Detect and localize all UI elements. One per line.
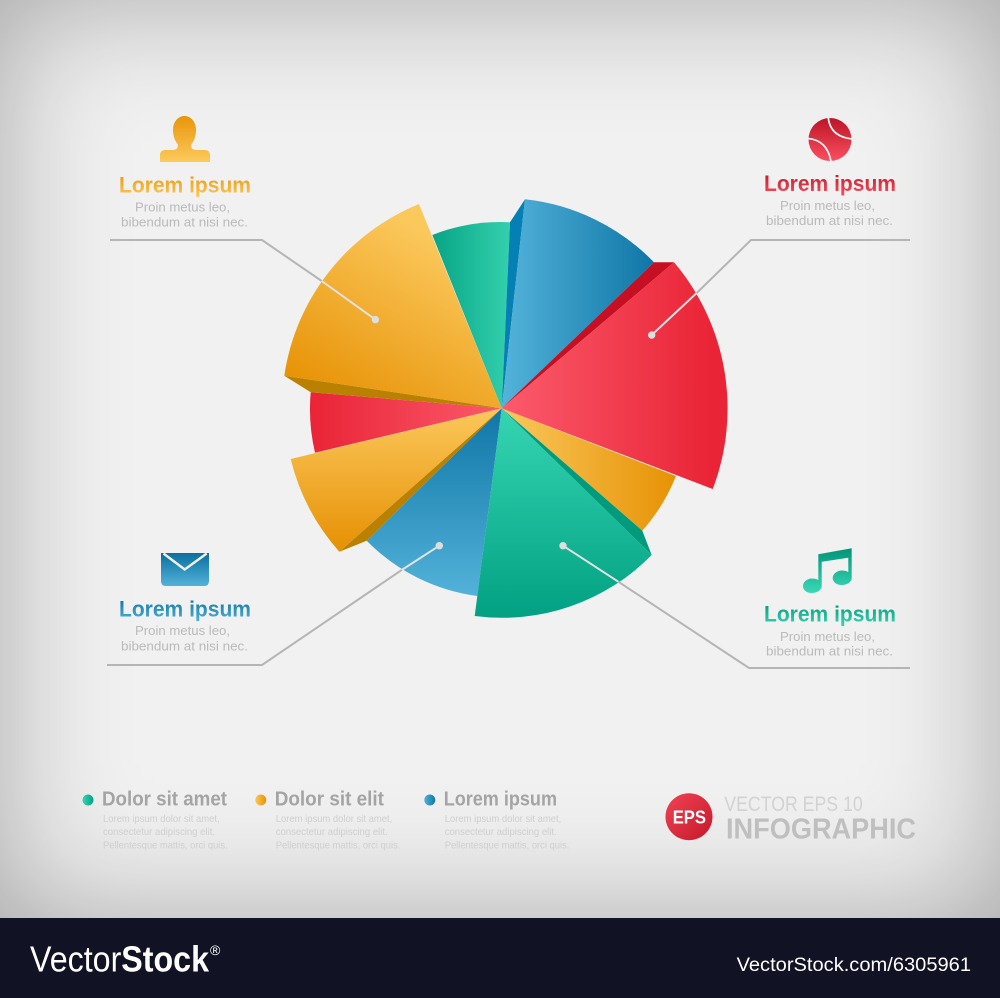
badge: EPS infographic bbox=[666, 793, 916, 845]
text block bbox=[121, 623, 248, 654]
text block bbox=[766, 629, 893, 659]
panel: top right callout bbox=[764, 118, 896, 228]
footer logo: VectorStock bbox=[30, 939, 210, 980]
slice: red left bbox=[310, 392, 502, 453]
heading: Lorem ipsum bbox=[119, 597, 251, 622]
legend text: consectetur adipiscing elit. bbox=[103, 826, 215, 838]
heading: Lorem ipsum bbox=[764, 602, 896, 627]
infographic label: INFOGRAPHIC bbox=[726, 813, 916, 845]
legend text: Lorem ipsum dolor sit amet, bbox=[445, 813, 561, 825]
slice: red right bbox=[502, 262, 728, 489]
heading: Lorem ipsum bbox=[119, 173, 251, 198]
legend dot bbox=[255, 794, 266, 806]
panel: legend item orange bbox=[255, 788, 400, 852]
footer bar bbox=[0, 918, 1000, 998]
panel: legend item blue bbox=[424, 788, 569, 852]
panel: bottom right callout bbox=[764, 548, 896, 659]
footer url: VectorStock.com/6305961 bbox=[737, 955, 971, 976]
icon: ball bbox=[808, 118, 852, 162]
legend text bbox=[445, 813, 569, 852]
slice side: red right bbox=[502, 262, 674, 408]
text block: bibendum at nisi nec. bbox=[766, 644, 893, 659]
text block: bibendum at nisi nec. bbox=[766, 213, 893, 228]
legend text: Pellentesque mattis, orci quis. bbox=[445, 840, 569, 852]
slice side: orange upper left bbox=[284, 376, 502, 408]
text block bbox=[766, 198, 893, 228]
slice: blue top bbox=[502, 199, 654, 408]
legend heading: Lorem ipsum bbox=[444, 788, 557, 810]
legend heading: Dolor sit elit bbox=[275, 788, 384, 810]
text block: Proin metus leo, bbox=[780, 198, 875, 213]
text block bbox=[121, 200, 248, 230]
icon: envelope bbox=[161, 553, 209, 586]
legend text bbox=[103, 813, 228, 852]
slice: blue bottom bbox=[367, 408, 502, 596]
text block: Proin metus leo, bbox=[135, 200, 230, 215]
badge label: EPS bbox=[673, 807, 706, 827]
leader line: bottom right bbox=[559, 542, 910, 668]
vector label: VECTOR EPS 10 bbox=[724, 793, 863, 816]
legend text: Pellentesque mattis, orci quis. bbox=[103, 840, 228, 852]
leader line: top right bbox=[648, 240, 910, 339]
panel: bottom left callout bbox=[119, 553, 251, 654]
panel: legend item green bbox=[82, 788, 228, 852]
slice side: green bottom bbox=[502, 408, 652, 555]
legend dot bbox=[82, 794, 94, 806]
leader line: bottom left bbox=[107, 542, 443, 665]
legend dot bbox=[424, 794, 435, 806]
legend text: Lorem ipsum dolor sit amet, bbox=[276, 813, 392, 825]
panel: top left callout bbox=[119, 116, 251, 230]
icon: music note bbox=[803, 548, 852, 593]
leader line: top left bbox=[110, 240, 379, 323]
legend text: Pellentesque mattis, orci quis. bbox=[276, 840, 400, 852]
legend text: consectetur adipiscing elit. bbox=[445, 826, 557, 838]
slice: orange right bbox=[502, 408, 676, 531]
legend text: Lorem ipsum dolor sit amet, bbox=[103, 813, 220, 825]
registered mark: ® bbox=[210, 942, 221, 958]
slice: green top bbox=[432, 222, 510, 408]
slice side: blue top bbox=[502, 199, 525, 408]
icon: person bbox=[160, 116, 210, 162]
heading: Lorem ipsum bbox=[764, 171, 896, 196]
text block: bibendum at nisi nec. bbox=[121, 639, 248, 654]
pie chart bbox=[284, 199, 728, 618]
text block: bibendum at nisi nec. bbox=[121, 215, 248, 230]
legend text: consectetur adipiscing elit. bbox=[276, 826, 388, 838]
legend text bbox=[276, 813, 400, 852]
slice: orange upper left bbox=[284, 204, 502, 408]
text block: Proin metus leo, bbox=[780, 629, 875, 644]
legend heading: Dolor sit amet bbox=[102, 788, 227, 810]
slice: orange lower left bbox=[291, 408, 502, 552]
slice: green bottom bbox=[475, 408, 652, 618]
icon: EPS circle bbox=[666, 793, 712, 840]
slice side: orange lower left bbox=[339, 408, 502, 552]
text block: Proin metus leo, bbox=[135, 623, 230, 638]
